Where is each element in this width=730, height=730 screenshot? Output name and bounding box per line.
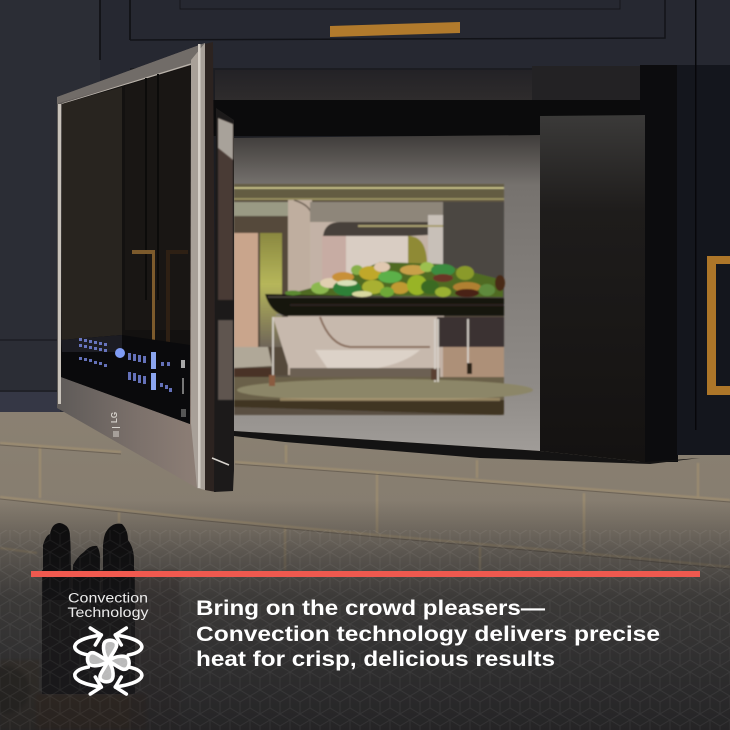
speckled side panel — [540, 115, 645, 462]
rack — [273, 315, 504, 382]
background: tiled wall — [0, 400, 730, 730]
headline text: Convection technology delivers precise — [196, 622, 660, 646]
middle reflection — [288, 200, 312, 375]
headline text: Bring on the crowd pleasers— — [196, 596, 546, 620]
control panel — [61, 335, 190, 424]
label: Convection Technology: Convection — [68, 590, 148, 606]
top frame band — [57, 43, 205, 104]
left wall — [234, 200, 290, 375]
food: brussels sprouts — [285, 262, 505, 297]
headline text — [196, 596, 660, 671]
label: Convection Technology: Technology — [68, 605, 149, 620]
dark overlay with hexagon pattern — [0, 500, 730, 730]
icon: convection fan with arrows — [75, 628, 142, 694]
cabinet handle — [707, 256, 730, 395]
door inner edge — [205, 42, 234, 492]
turntable plate — [234, 377, 504, 402]
baking pan — [265, 294, 504, 316]
upper cabinetry — [0, 0, 730, 412]
door glass — [61, 65, 191, 424]
right wall — [443, 202, 504, 304]
front stainless frame — [234, 135, 540, 451]
oven window interior — [234, 184, 533, 415]
edge highlight — [212, 458, 229, 465]
lower counter backdrop — [0, 570, 180, 730]
LG logo — [110, 412, 120, 437]
LG logo: LG — [110, 412, 119, 423]
microwave body — [212, 66, 700, 464]
control panel LEDs — [79, 338, 172, 392]
knife block — [42, 523, 135, 694]
label: Convection Technology — [68, 590, 149, 620]
red divider bar — [31, 571, 700, 577]
reflected handle — [132, 250, 155, 350]
right bright strip — [191, 43, 205, 490]
headline text: heat for crisp, delicious results — [196, 647, 555, 671]
right cabinet with handle — [640, 0, 730, 462]
drawer handle — [330, 22, 460, 37]
top strip — [234, 184, 504, 201]
below pan — [273, 317, 437, 372]
back wall — [310, 202, 444, 377]
stainless frame — [57, 43, 205, 490]
microwave door — [57, 43, 205, 490]
